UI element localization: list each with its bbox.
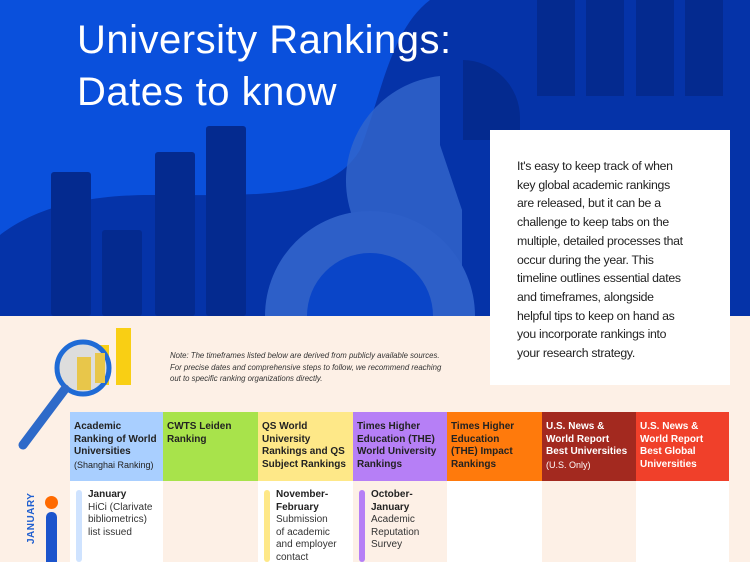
column headers: CWTS Leiden [167,421,231,432]
column headers: Times Higher [451,421,514,432]
title: University Rankings: [77,18,452,62]
entry: ARWU: January [88,489,126,500]
column headers: Rankings [357,458,402,470]
entry: THE: Academic [371,514,415,525]
entry: ARWU: bibliometrics) [88,514,147,525]
column headers: (U.S. Only) [546,460,591,470]
column headers: Best Universities [546,446,627,457]
January month marker [26,493,58,562]
note: Note: The timeframes listed below are derived from publicly available sources. For precise dates and comprehensive steps to follow, we recommend reaching out to specific ranking organizations directly. [170,351,441,383]
icon: magnifying glass over bars [18,328,131,450]
column headers: University [262,434,310,444]
entry: THE: January [371,502,409,512]
column headers: World Report [640,434,703,444]
entry: QS: November- [276,489,328,500]
intro text box: key global academic rankings [517,178,670,192]
column headers: Academic [74,421,121,432]
title [77,18,452,114]
intro text box: occur during the year. This [517,253,654,267]
intro text box: challenge to keep tabs on the [517,215,669,229]
intro text box: are released, but it can be a [517,196,661,210]
intro text box: you incorporate rankings into [517,327,666,341]
column headers: Universities [74,446,131,457]
column headers: (Shanghai Ranking) [74,460,154,470]
header background [0,0,750,316]
intro text box: helpful tips to keep on hand as [517,309,675,323]
column headers: Rankings [451,458,496,470]
title: Dates to know [77,70,337,114]
entry: QS: Submission [276,514,328,525]
entry: QS: February [276,502,319,512]
column headers: Rankings and QS [262,446,345,457]
January month marker: JANUARY [26,493,37,544]
column headers: Ranking of World [74,434,157,444]
intro text box: multiple, detailed processes that [517,234,683,248]
column headers: (THE) Impact [451,446,513,457]
column headers: World Report [546,434,609,444]
entry: QS: of academic [276,526,330,538]
intro text box: your research strategy. [517,346,635,360]
entry: QS: and employer [276,539,337,550]
intro text box: timeline outlines essential dates [517,271,681,285]
entry: THE: Reputation [371,526,419,538]
entry: THE: October- [371,489,413,500]
column headers: U.S. News & [640,421,698,432]
entry: ARWU: HiCi (Clarivate [88,502,152,512]
column headers: Ranking [167,434,206,444]
header bar chart shapes [51,0,723,316]
intro text box [490,130,730,385]
column headers: Education (THE) [357,434,435,444]
entry: QS [264,489,337,562]
column headers: Subject Rankings [262,458,346,470]
column headers: U.S. News & [546,421,604,432]
entry: THE: Survey [371,539,402,550]
intro text box: and timeframes, alongside [517,290,654,304]
column headers: Times Higher [357,421,420,432]
column headers: World University [357,446,436,457]
column headers: Education [451,434,499,444]
entry: THE [359,489,419,562]
entry: ARWU [76,489,152,562]
column headers: Best Global [640,446,696,457]
column headers: QS World [262,421,307,432]
column headers [70,412,729,481]
column headers: Universities [640,458,697,470]
intro text box: It's easy to keep track of when [517,159,673,173]
entry: ARWU: list issued [88,526,132,538]
